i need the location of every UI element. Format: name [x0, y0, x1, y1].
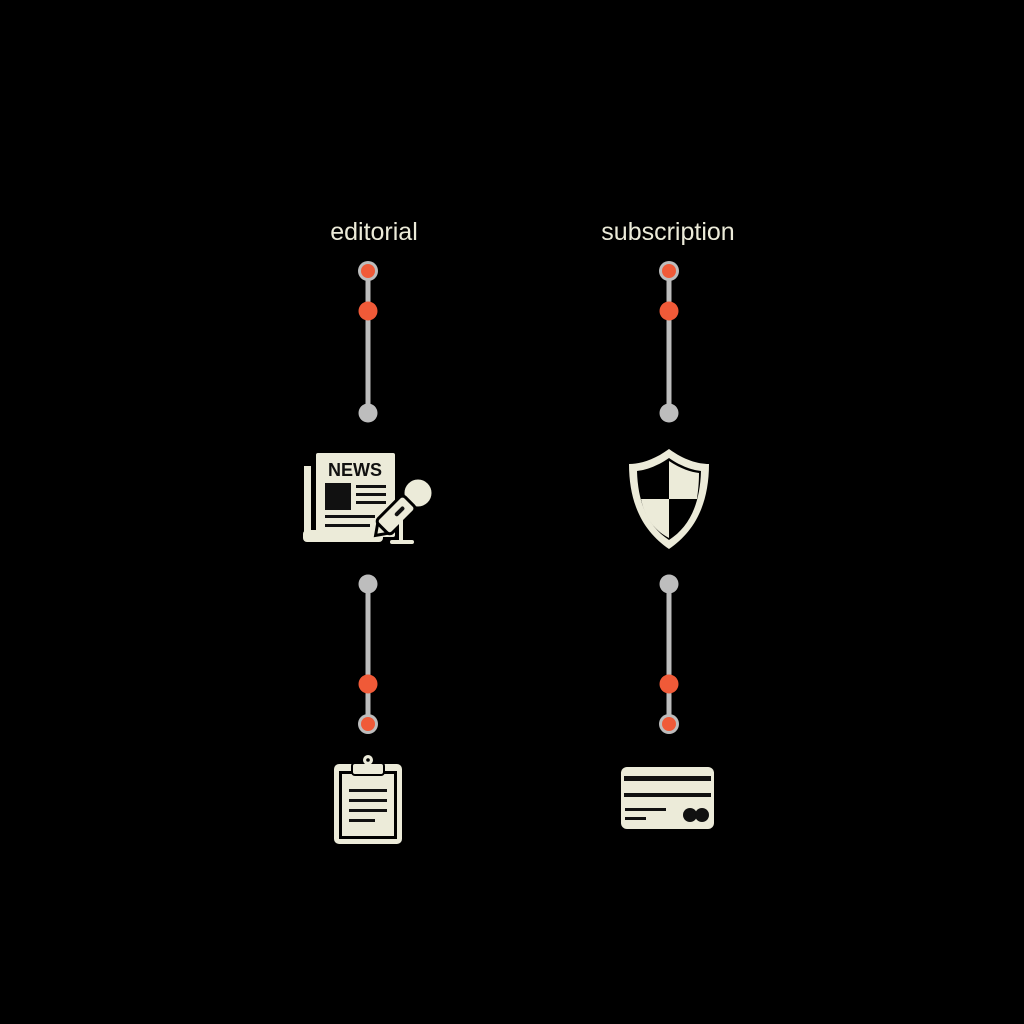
heading: subscription: subscription — [601, 218, 735, 246]
connector: editorial top — [358, 261, 378, 422]
icon: newspaper with microphone — [303, 453, 439, 546]
heading: editorial: editorial — [330, 218, 418, 246]
icon: shield — [629, 449, 709, 549]
icon: newspaper with microphone: NEWS — [328, 460, 382, 480]
connector: subscription bottom — [659, 574, 679, 734]
connector: subscription top — [659, 261, 679, 422]
icon: credit card — [621, 767, 714, 829]
connector: editorial bottom — [358, 574, 378, 734]
icon: clipboard — [334, 755, 402, 844]
